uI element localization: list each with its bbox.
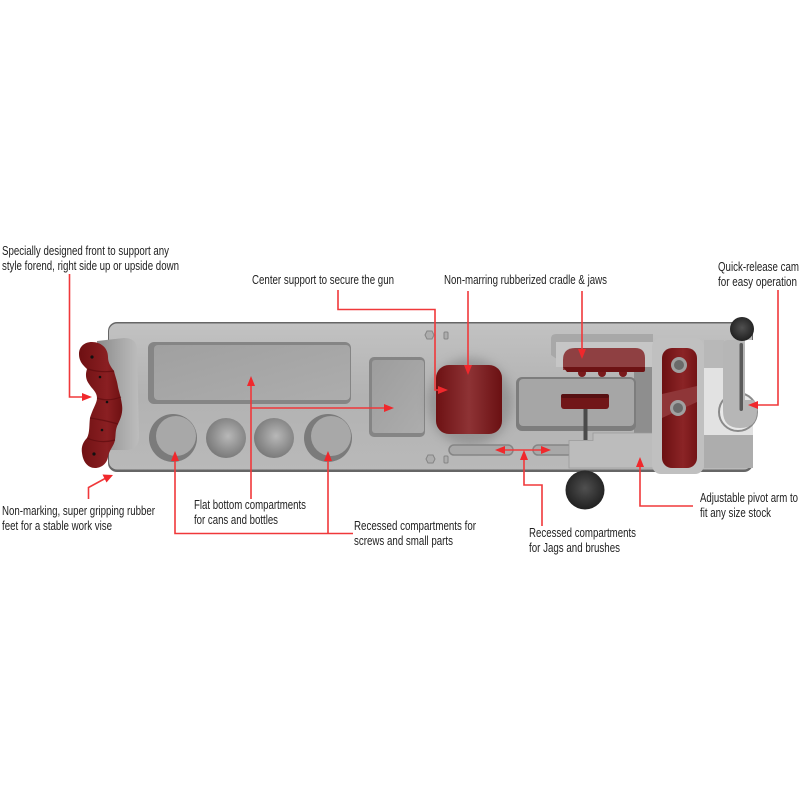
- label: flat bottom compartments: [194, 497, 306, 527]
- compartment: round flat left: [149, 414, 197, 462]
- label: cradle and jaws: Non-marring rubberized cradle & jaws: [444, 272, 607, 287]
- label: front support: style forend, right side up or upside down: [2, 258, 179, 273]
- label: front support: Specially designed front to support any: [2, 243, 169, 258]
- label: flat bottom compartments: Flat bottom compartments: [194, 497, 306, 512]
- label: recessed compartments for screws: screws and small parts: [354, 533, 453, 548]
- arrow: to jaw: [578, 291, 586, 359]
- compartment: right: [516, 377, 636, 431]
- label: center support: Center support to secure the gun: [252, 272, 394, 287]
- panel: vise tray: [79, 317, 757, 510]
- arrow: front support: [70, 274, 92, 401]
- hex marks: [425, 331, 448, 463]
- arrow: recessed compartments for screws: [171, 451, 353, 534]
- label: recessed compartments for screws: [354, 518, 476, 548]
- clamp screw: [561, 394, 609, 440]
- label: front support: [2, 243, 179, 273]
- compartment: round bowl right: [254, 418, 294, 458]
- pivot plate: [652, 338, 704, 474]
- cradle: [551, 334, 653, 377]
- clamp ball: [566, 470, 604, 510]
- label: jags and brushes: Recessed compartments: [529, 525, 636, 540]
- slots for jags and brushes: [449, 445, 573, 455]
- cam housing: [704, 340, 757, 468]
- label: quick-release cam: [718, 259, 799, 289]
- arrow: rubber feet: [88, 474, 113, 499]
- arrow: quick-release cam: [748, 290, 778, 409]
- bolt upper: [671, 357, 687, 373]
- label: jags and brushes: for Jags and brushes: [529, 540, 620, 555]
- label: pivot arm: [700, 490, 798, 520]
- arrow: flat bottom compartments: [247, 376, 394, 499]
- pivot arm: [569, 433, 655, 468]
- compartment: center: [369, 357, 425, 437]
- label: flat bottom compartments: for cans and bottles: [194, 512, 278, 527]
- arrow: pivot arm: [636, 457, 693, 506]
- label: jags and brushes: [529, 525, 636, 555]
- compartment: round bowl left: [206, 418, 246, 458]
- label: recessed compartments for screws: Recessed compartments for: [354, 518, 476, 533]
- shaded recess beside plate: [634, 367, 654, 435]
- arrow: center support: [338, 290, 448, 394]
- rubber feet: [79, 342, 122, 468]
- arrow: to cylinder: [464, 291, 472, 375]
- label: rubber feet: Non-marking, super gripping rubber: [2, 503, 155, 518]
- label: pivot arm: fit any size stock: [700, 505, 771, 520]
- compartment: large flat bottom: [148, 342, 351, 404]
- arrow: jags and brushes: [495, 446, 551, 526]
- compartment: round flat right: [304, 414, 352, 462]
- label: rubber feet: [2, 503, 155, 533]
- bolt lower: [670, 400, 686, 416]
- front mount: [97, 338, 139, 450]
- rubber jaw: [563, 348, 645, 377]
- center support cylinder: [428, 358, 512, 446]
- quick-release cam: [723, 317, 757, 428]
- label: rubber feet: feet for a stable work vise: [2, 518, 112, 533]
